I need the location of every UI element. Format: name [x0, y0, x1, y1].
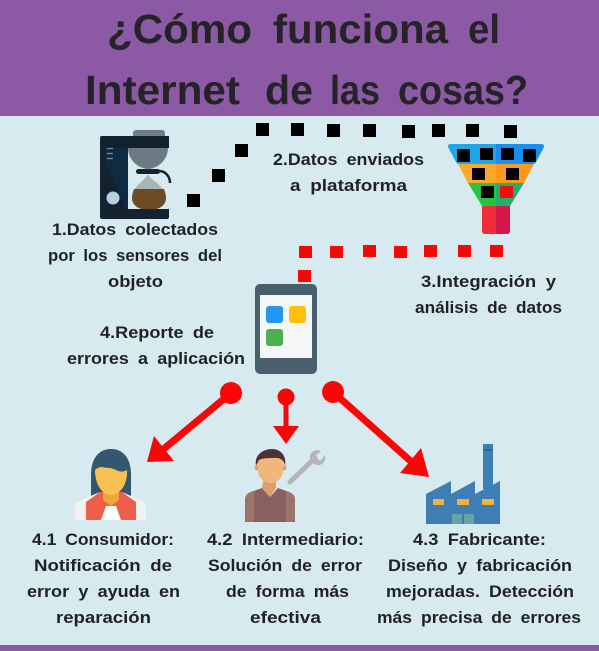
text: manufacturer: mejoradas. Detección [386, 582, 574, 601]
title banner: ¿Cómo [107, 6, 252, 52]
text: step 1: objeto [108, 272, 163, 291]
text: step 3: análisis de datos [415, 298, 562, 317]
title banner: las [330, 67, 380, 113]
text: step 1: por los sensores del [48, 246, 222, 265]
text: consumer [27, 530, 180, 627]
text: manufacturer: Diseño y fabricación [388, 556, 572, 575]
arrow: to intermediary [273, 388, 299, 444]
text: step 4: errores a aplicación [67, 349, 245, 368]
text: step 1 [48, 220, 222, 291]
bottom strip [0, 645, 599, 651]
text: intermediary: de forma más [226, 582, 349, 601]
black data squares path [187, 123, 517, 207]
title banner: cosas? [398, 67, 528, 113]
icon: consumer woman [75, 449, 146, 520]
title banner: funciona [273, 6, 449, 52]
text: manufacturer [377, 530, 581, 627]
icon: coffee maker [100, 130, 170, 219]
text: manufacturer: 4.3 Fabricante: [413, 530, 546, 549]
text: step 2: a plataforma [290, 176, 408, 195]
icon: funnel with data squares [448, 144, 544, 234]
text: consumer: 4.1 Consumidor: [32, 530, 174, 549]
red data squares path [298, 245, 503, 282]
text: consumer: error y ayuda en [27, 582, 180, 601]
text: step 2: 2.Datos enviados [273, 150, 424, 169]
text: step 4 [67, 323, 245, 368]
arrow: to manufacturer [322, 381, 429, 477]
text: step 1: 1.Datos colectados [52, 220, 218, 239]
text: intermediary: 4.2 Intermediario: [207, 530, 364, 549]
title banner [0, 0, 599, 116]
text: manufacturer: más precisa de errores [377, 608, 581, 627]
text: consumer: reparación [56, 608, 151, 627]
title banner: Internet [85, 67, 240, 113]
text: step 3: 3.Integración y [421, 272, 557, 291]
arrow: to consumer [147, 382, 242, 462]
title banner: el [468, 6, 500, 52]
text: intermediary: efectiva [250, 608, 322, 627]
text: step 3 [415, 272, 562, 317]
title banner: de [265, 67, 313, 113]
text: step 4: 4.Reporte de [100, 323, 214, 342]
text: intermediary: Solución de error [208, 556, 362, 575]
icon: phone app [255, 284, 317, 374]
text: consumer: Notificación de [34, 556, 172, 575]
icon: factory [426, 444, 500, 524]
text: intermediary [207, 530, 364, 627]
text: step 2 [273, 150, 424, 195]
icon: intermediary man with wrench [245, 449, 325, 522]
